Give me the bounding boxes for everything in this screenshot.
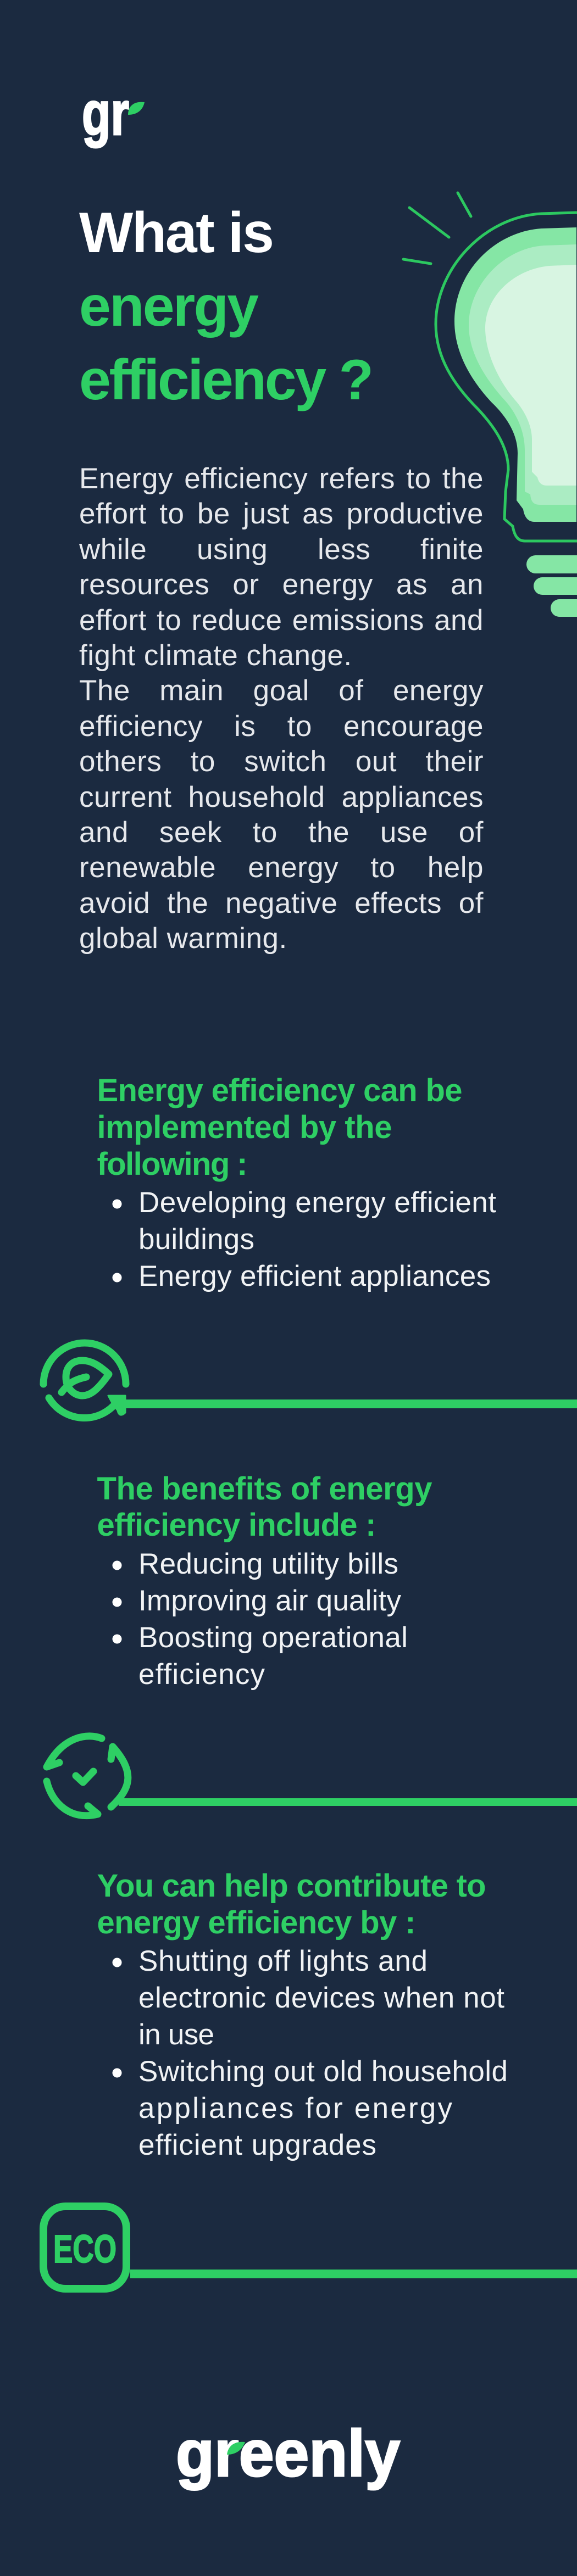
text block: definition: current household appliances	[79, 781, 484, 813]
icon: light rays	[403, 193, 471, 264]
text block: definition: renewable energy to help	[79, 851, 484, 884]
heading: benefits	[97, 1471, 432, 1543]
title: energy	[79, 275, 259, 338]
text block: definition: while using less finite	[79, 533, 484, 566]
heading: how to contribute	[97, 1868, 486, 1941]
list: benefits: efficiency	[138, 1658, 265, 1691]
heading: benefits: The benefits of energy	[97, 1471, 432, 1507]
text block: definition: effort to be just as productive	[79, 498, 484, 530]
list: implementation: buildings	[138, 1223, 254, 1256]
icon: leaf in recycling ring with connector	[43, 1343, 577, 1418]
heading: implementation	[97, 1073, 463, 1182]
title: What is	[79, 201, 274, 265]
list: benefits	[112, 1548, 408, 1691]
list: how to contribute: Shutting off lights and	[138, 1945, 428, 1977]
heading: benefits: efficiency include :	[97, 1507, 376, 1543]
panel: benefits	[97, 1471, 432, 1691]
title	[79, 201, 374, 412]
heading: how to contribute: energy efficiency by :	[97, 1905, 415, 1941]
list: how to contribute: in use	[138, 2019, 214, 2051]
icon: ECO badge with connector: ECO	[53, 2228, 116, 2271]
list: benefits: Reducing utility bills	[138, 1548, 398, 1580]
panel: how to contribute	[97, 1868, 508, 2161]
list: benefits: Boosting operational	[138, 1621, 408, 1654]
list: implementation	[112, 1186, 496, 1292]
icon: ECO badge with connector	[43, 2206, 577, 2289]
text block: definition	[79, 462, 484, 955]
list: how to contribute	[112, 1945, 508, 2161]
text block: definition: others to switch out their	[79, 745, 484, 778]
text block: definition: fight climate change.	[79, 639, 352, 672]
list: benefits: Improving air quality	[138, 1585, 401, 1617]
text block: definition: avoid the negative effects of	[79, 887, 484, 919]
text block: definition: global warming.	[79, 922, 287, 955]
text block: definition: resources or energy as an	[79, 568, 484, 601]
list: implementation: Energy efficient appliances	[138, 1260, 491, 1292]
list: how to contribute: efficient upgrades	[138, 2129, 376, 2161]
heading: implementation: Energy efficiency can be	[97, 1073, 463, 1108]
list: how to contribute: electronic devices when not	[138, 1982, 504, 2014]
heading: how to contribute: You can help contribute to	[97, 1868, 486, 1904]
logo: gr mark: gr	[82, 79, 129, 148]
text block: definition: The main goal of energy	[79, 674, 484, 707]
logo: greenly wordmark: greenly	[176, 2417, 400, 2490]
icon: bulb base bars	[526, 555, 577, 617]
heading: implementation: implemented by the	[97, 1109, 392, 1145]
icon: light bulb	[403, 193, 577, 617]
text block: definition: and seek to the use of	[79, 816, 484, 849]
list: implementation: Developing energy efficient	[138, 1186, 496, 1219]
icon: check in cycle arrows with connector	[47, 1736, 577, 1816]
title: efficiency ?	[79, 348, 374, 412]
panel: implementation	[97, 1073, 496, 1292]
heading: implementation: following :	[97, 1146, 247, 1182]
text block: definition: efficiency is to encourage	[79, 710, 484, 743]
text block: definition: Energy efficiency refers to the	[79, 462, 484, 495]
text block: definition: effort to reduce emissions and	[79, 604, 484, 637]
list: how to contribute: appliances for energy	[138, 2092, 453, 2125]
list: how to contribute: Switching out old household	[138, 2055, 508, 2088]
